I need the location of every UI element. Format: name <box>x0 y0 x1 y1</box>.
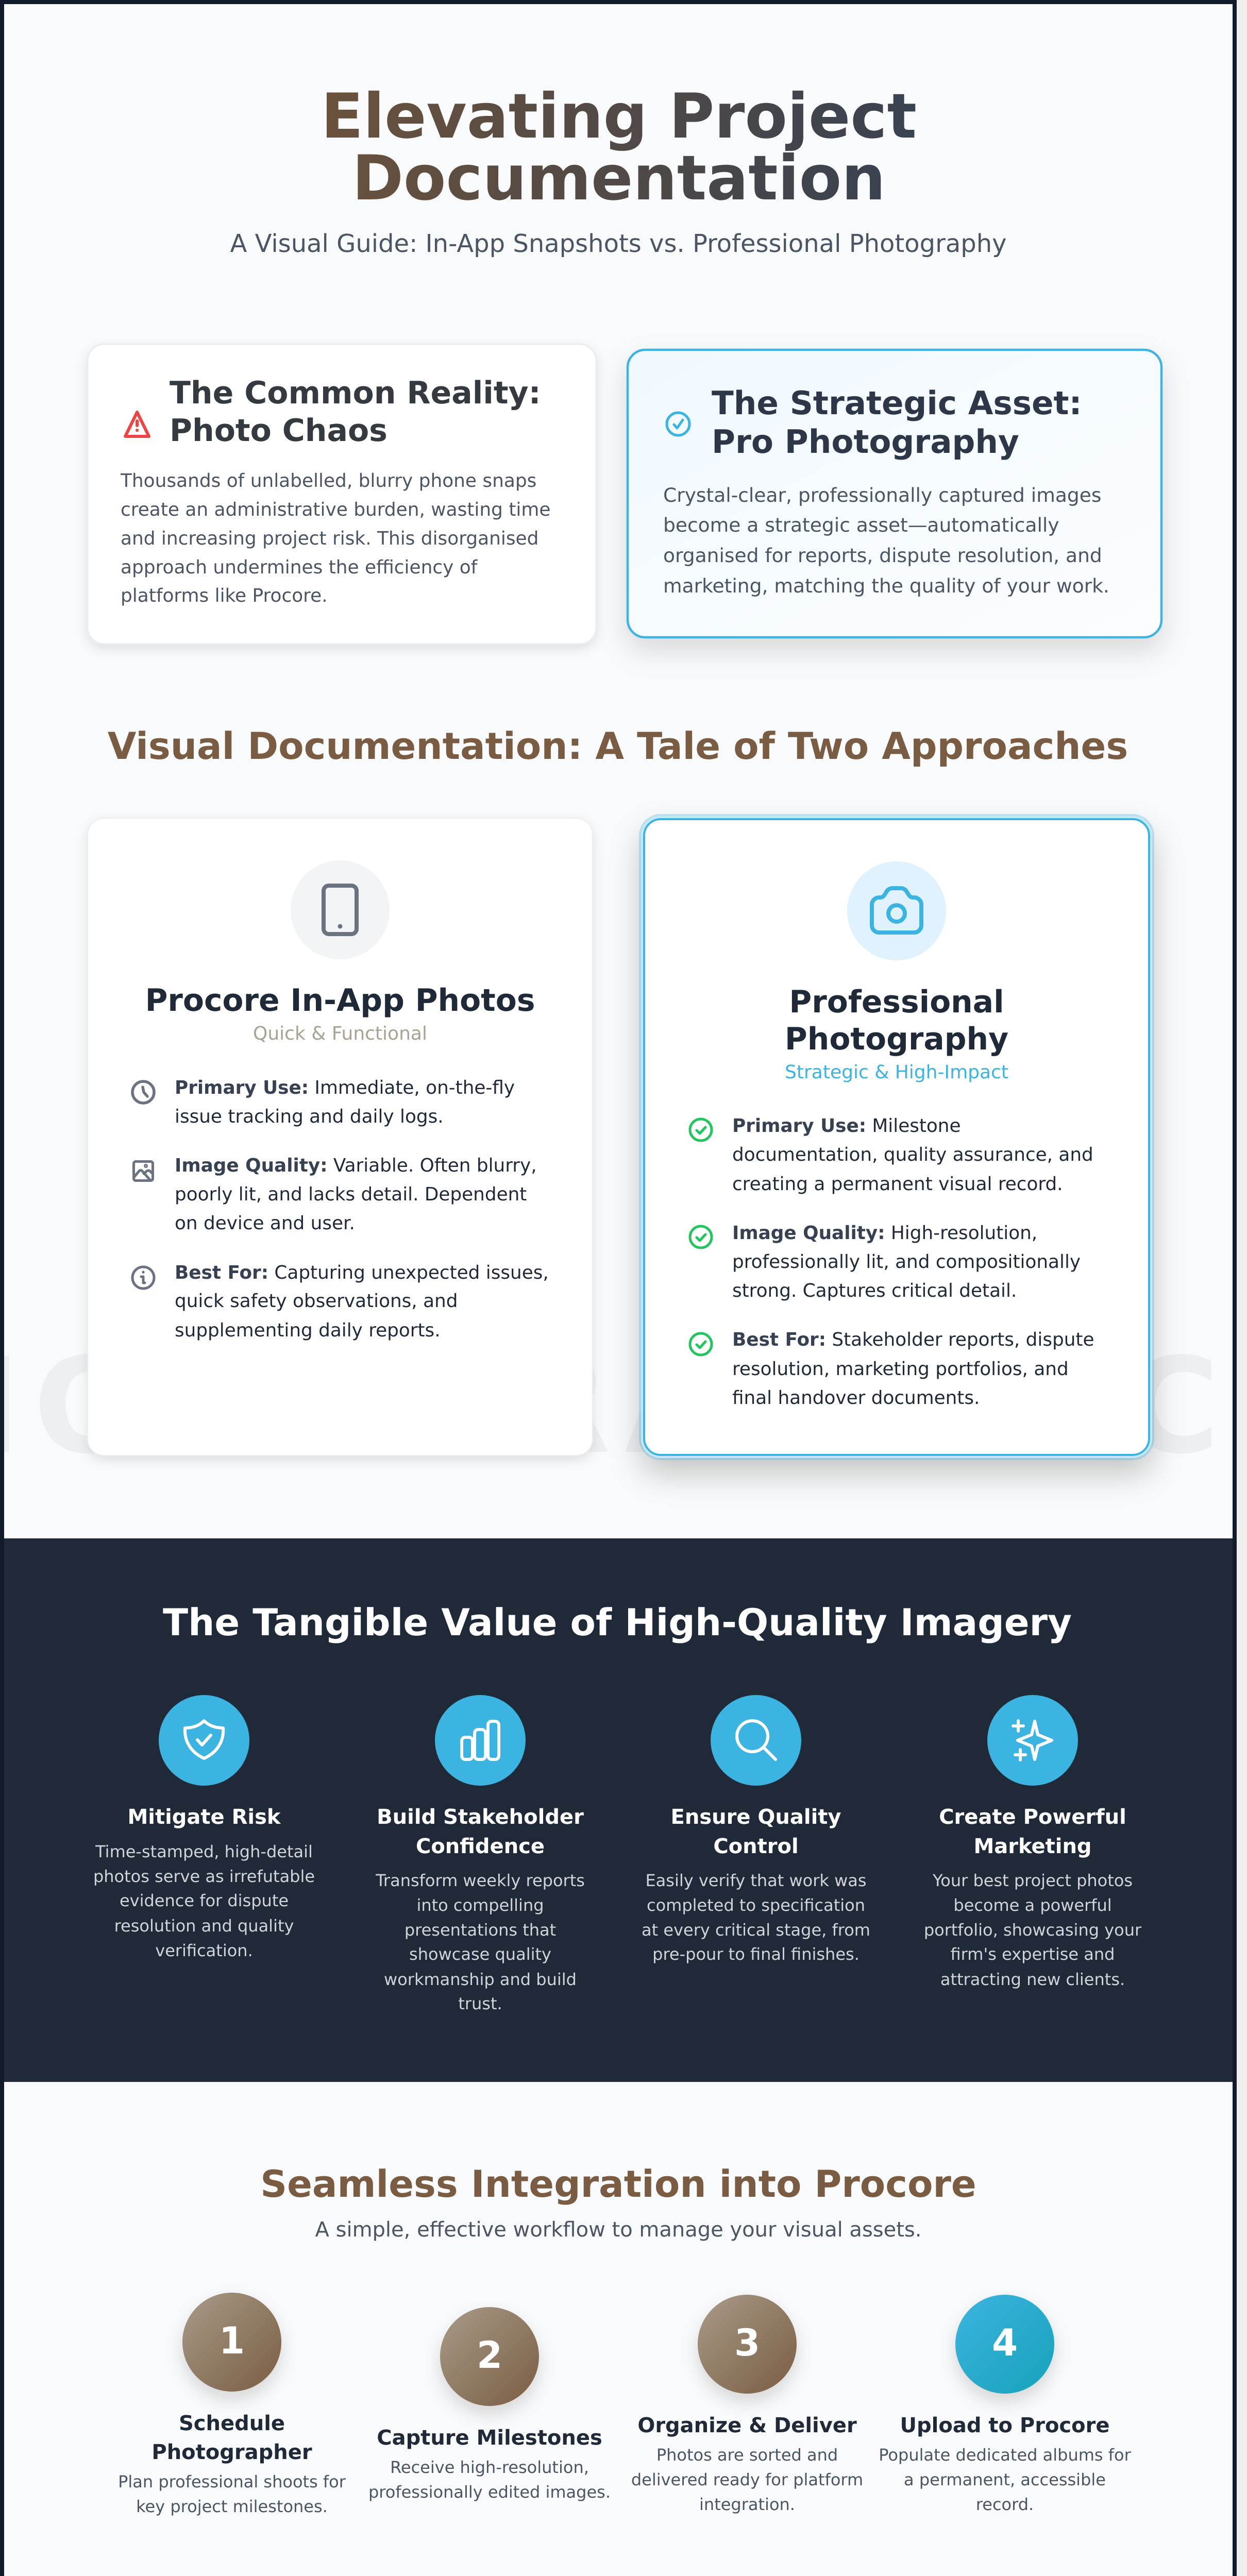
title: quality control: Ensure Quality <box>671 1805 841 1829</box>
title: upload to procore: Upload to Procore <box>900 2414 1109 2437</box>
heading: tangible value: The Tangible Value of High-Quality Imagery <box>163 1601 1072 1644</box>
badge: 1 <box>182 2293 281 2392</box>
heading: common reality: Photo Chaos <box>170 413 387 449</box>
heading: two approaches: Visual Documentation: A Tale of Two Approaches <box>108 724 1128 768</box>
icon: image <box>134 1161 153 1181</box>
text: powerful marketing: Your best project photos <box>932 1871 1133 1890</box>
text: best for: supplementing daily reports. <box>175 1320 441 1341</box>
text: mitigate risk: resolution and quality <box>114 1916 294 1936</box>
text: mitigate risk: Time-stamped, high-detail <box>95 1842 313 1861</box>
title: stakeholder confidence: Confidence <box>416 1835 545 1858</box>
text: image quality: Image Quality: <box>732 1223 885 1244</box>
title: stakeholder confidence: Build Stakeholder <box>377 1805 584 1829</box>
icon: warning triangle <box>125 412 149 436</box>
list item: best for <box>132 1262 549 1341</box>
header <box>230 81 1007 258</box>
text: primary use: documentation, quality assurance, and <box>732 1144 1093 1165</box>
icon: magnifier <box>711 1695 801 1786</box>
badge: 3: 3 <box>734 2321 760 2364</box>
text: capture milestones: Receive high-resolution, <box>390 2458 589 2477</box>
heading: professional photography: Professional <box>789 984 1004 1020</box>
text: primary use: issue tracking and daily logs. <box>175 1106 444 1127</box>
text: best for: resolution, marketing portfolios, and <box>732 1359 1069 1380</box>
text: stakeholder confidence: presentations that <box>405 1920 556 1940</box>
panel: the strategic asset <box>628 350 1161 637</box>
text: quality control: completed to specification <box>647 1895 865 1915</box>
icon: check <box>690 1226 712 1248</box>
text: stakeholder confidence: workmanship and build <box>384 1970 577 1989</box>
icon: check <box>690 1333 712 1355</box>
text: quality control: Easily verify that work was <box>645 1871 867 1890</box>
text: upload to procore: Populate dedicated albums for <box>879 2445 1132 2465</box>
text: image quality: Variable. Often blurry, <box>328 1155 537 1176</box>
text: mitigate risk: evidence for dispute <box>120 1891 289 1910</box>
list item: image quality <box>134 1155 537 1234</box>
list item: primary use <box>690 1115 1093 1195</box>
icon: check circle <box>667 413 689 435</box>
text: image quality: professionally lit, and compositionally <box>732 1251 1081 1273</box>
step 3 <box>631 2295 863 2514</box>
panel: professional photography <box>641 816 1152 1458</box>
list item: primary use <box>132 1077 515 1127</box>
text: schedule photographer: Plan professional shoots for <box>118 2472 346 2492</box>
step 1 <box>118 2293 346 2516</box>
text: image quality: on device and user. <box>175 1213 355 1234</box>
text: strategic asset: become a strategic asset—automatically <box>663 514 1059 536</box>
text: quality control: at every critical stage, from <box>642 1920 870 1940</box>
background watermark lettering <box>0 1330 1220 1483</box>
text: best for: Capturing unexpected issues, <box>268 1262 549 1283</box>
icon: bars <box>435 1695 526 1786</box>
badge: 4: 4 <box>992 2321 1018 2364</box>
heading: professional photography: Photography <box>785 1021 1008 1057</box>
icon: phone <box>291 860 390 959</box>
text: image quality: High-resolution, <box>885 1223 1037 1244</box>
heading: strategic asset: Pro Photography <box>712 423 1019 461</box>
value: mitigate risk <box>93 1695 315 1960</box>
panel: the common reality <box>88 344 596 644</box>
text: powerful marketing: attracting new clients. <box>940 1970 1125 1989</box>
badge: 1: 1 <box>219 2319 245 2362</box>
text: common reality: Thousands of unlabelled, blurry phone snaps <box>120 470 536 492</box>
text: strategic asset: marketing, matching the quality of your work. <box>663 574 1109 597</box>
icon: info <box>132 1267 154 1289</box>
icon: clock <box>132 1081 154 1103</box>
text: powerful marketing: firm's expertise and <box>951 1944 1115 1964</box>
icon: check <box>690 1119 712 1141</box>
text: stakeholder confidence: trust. <box>458 1994 502 2013</box>
icon: sparkles <box>987 1695 1078 1786</box>
text: common reality: and increasing project risk. This disorganised <box>121 528 538 549</box>
title: capture milestones: Capture Milestones <box>377 2426 602 2450</box>
value: stakeholder confidence <box>375 1695 585 2013</box>
text: strategic asset: organised for reports, dispute resolution, and <box>663 544 1102 567</box>
text: best for: final handover documents. <box>732 1387 980 1409</box>
text: best for: Stakeholder reports, dispute <box>826 1329 1094 1350</box>
text: organize and deliver: Photos are sorted and <box>656 2445 838 2465</box>
title: powerful marketing: Create Powerful <box>939 1805 1126 1829</box>
list item: image quality <box>690 1223 1081 1301</box>
title: organize and deliver: Organize & Deliver <box>637 2414 857 2437</box>
subtitle: A Visual Guide: In-App Snapshots vs. Professional Photography <box>230 229 1007 258</box>
text: common reality: create an administrative burden, wasting time <box>121 499 550 520</box>
text: stakeholder confidence: into compelling <box>416 1895 544 1915</box>
title: mitigate risk: Mitigate Risk <box>127 1805 281 1829</box>
text: primary use: Primary Use: <box>175 1077 309 1098</box>
text: primary use: Milestone <box>866 1115 961 1137</box>
value: quality control <box>642 1695 870 1964</box>
text: capture milestones: professionally edited images. <box>368 2482 611 2502</box>
text: organize and deliver: integration. <box>699 2495 795 2514</box>
text: powerful marketing: become a powerful <box>953 1895 1112 1915</box>
text: powerful marketing: portfolio, showcasing your <box>924 1920 1142 1940</box>
text: primary use: creating a permanent visual record. <box>732 1174 1063 1195</box>
text: schedule photographer: key project milestones. <box>136 2497 328 2516</box>
title: quality control: Control <box>713 1835 799 1858</box>
subheading: quick and functional: Quick & Functional <box>253 1023 427 1044</box>
title: Elevating Project <box>321 81 917 152</box>
heading: common reality: The Common Reality: <box>170 375 541 411</box>
list item: best for <box>690 1329 1094 1409</box>
heading: procore: Procore In-App Photos <box>145 982 535 1019</box>
value: powerful marketing <box>924 1695 1142 1989</box>
text: image quality: poorly lit, and lacks detail. Dependent <box>175 1184 527 1205</box>
heading: strategic asset: The Strategic Asset: <box>712 384 1082 422</box>
text: stakeholder confidence: showcase quality <box>409 1944 551 1964</box>
text: best for: quick safety observations, and <box>175 1291 458 1312</box>
text: mitigate risk: photos serve as irrefutable <box>93 1867 315 1886</box>
background watermark lettering: O <box>33 1330 146 1483</box>
text: upload to procore: a permanent, accessible <box>904 2470 1106 2489</box>
subheading: strategic and high-impact: Strategic & High-Impact <box>785 1062 1008 1083</box>
icon: camera <box>847 861 946 960</box>
badge: 2: 2 <box>477 2333 502 2377</box>
badge: 2 <box>440 2307 539 2406</box>
background watermark lettering: R <box>509 1330 611 1483</box>
icon: shield <box>159 1695 249 1786</box>
step 2 <box>368 2307 611 2502</box>
title: schedule photographer: Photographer <box>151 2441 312 2464</box>
text: upload to procore: record. <box>976 2495 1034 2514</box>
text: primary use: Immediate, on-the-fly <box>309 1077 515 1098</box>
text: strategic asset: Crystal-clear, professionally captured images <box>663 484 1101 506</box>
panel: tangible value <box>4 1538 1233 2082</box>
title: Documentation <box>352 143 886 214</box>
subheading: workflow: A simple, effective workflow to manage your visual assets. <box>315 2218 921 2242</box>
text: image quality: strong. Captures critical detail. <box>732 1280 1017 1301</box>
heading: seamless integration: Seamless Integration into Procore <box>260 2162 976 2206</box>
text: best for: Best For: <box>732 1329 826 1350</box>
badge: 4 <box>955 2295 1054 2394</box>
title: schedule photographer: Schedule <box>179 2412 285 2435</box>
title: powerful marketing: Marketing <box>973 1835 1092 1858</box>
text: stakeholder confidence: Transform weekly reports <box>375 1871 585 1890</box>
step 4 <box>879 2295 1132 2514</box>
badge: 3 <box>698 2295 797 2394</box>
text: best for: Best For: <box>175 1262 268 1283</box>
text: organize and deliver: delivered ready for platform <box>631 2470 863 2489</box>
text: mitigate risk: verification. <box>155 1941 253 1960</box>
text: common reality: platforms like Procore. <box>121 585 328 606</box>
panel: procore in-app photos <box>88 818 593 1455</box>
background watermark lettering: A <box>625 1330 727 1483</box>
background watermark lettering: C <box>1123 1330 1220 1483</box>
text: quality control: pre-pour to final finishes. <box>652 1944 860 1964</box>
text: primary use: Primary Use: <box>732 1115 866 1137</box>
text: image quality: Image Quality: <box>175 1155 328 1176</box>
text: common reality: approach undermines the efficiency of <box>121 557 478 578</box>
